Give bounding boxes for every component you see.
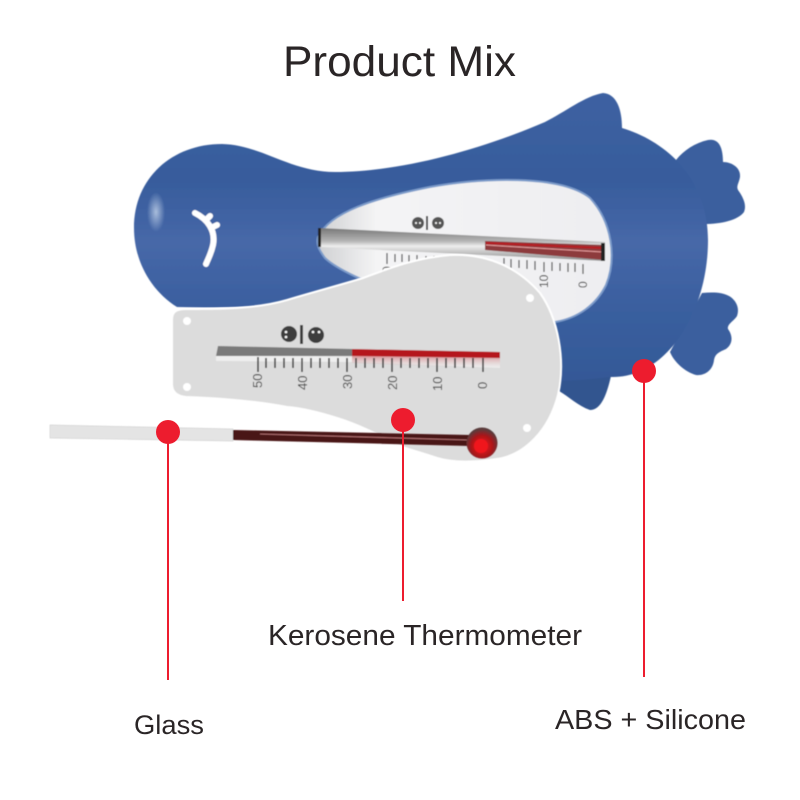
product body: blue bath thermometer: 0 bbox=[576, 281, 590, 288]
glass tube thermometer bbox=[50, 425, 498, 458]
plate scale numbers: 20 bbox=[385, 376, 400, 390]
window tube bbox=[318, 228, 605, 261]
plate ticks bbox=[258, 357, 483, 372]
eyelash mark bbox=[195, 213, 217, 264]
callout: kerosene thermometer bbox=[268, 408, 582, 652]
window bbox=[317, 180, 612, 322]
callout: kerosene thermometer: Kerosene Thermometer bbox=[268, 620, 582, 652]
callout: glass: Glass bbox=[134, 710, 204, 740]
callout: glass bbox=[134, 420, 204, 740]
glass section bbox=[50, 425, 233, 441]
panel: kerosene thermometer white plate bbox=[172, 255, 561, 462]
callout: ABS + Silicone: ABS + Silicone bbox=[555, 704, 746, 735]
plate scale numbers: 40 bbox=[295, 376, 310, 390]
bulb bbox=[466, 428, 498, 458]
product body: blue bath thermometer: 10 bbox=[537, 274, 551, 288]
plate scale numbers: 50 bbox=[250, 374, 265, 388]
plate tube red section bbox=[352, 349, 500, 358]
plate scale numbers bbox=[250, 374, 490, 391]
callout: ABS + Silicone bbox=[555, 359, 746, 735]
window scale bbox=[387, 253, 583, 274]
plate tube gray section bbox=[216, 346, 352, 356]
upper fin bbox=[676, 140, 745, 224]
plate faces bbox=[281, 325, 324, 344]
title: Product Mix bbox=[283, 38, 517, 86]
plate scale numbers: 0 bbox=[475, 382, 490, 389]
highlight bbox=[147, 192, 165, 232]
window faces bbox=[412, 216, 444, 230]
plate tube shadow bbox=[216, 355, 500, 368]
plate scale numbers: 30 bbox=[340, 375, 355, 389]
tail bbox=[545, 368, 611, 410]
main shell bbox=[134, 93, 708, 381]
plate holes bbox=[183, 294, 534, 432]
liquid section bbox=[233, 430, 470, 446]
product body: blue bath thermometer bbox=[134, 93, 745, 410]
window scale numbers: 0 bbox=[380, 266, 394, 273]
lower fin bbox=[670, 292, 738, 375]
plate scale numbers: 10 bbox=[430, 377, 445, 391]
